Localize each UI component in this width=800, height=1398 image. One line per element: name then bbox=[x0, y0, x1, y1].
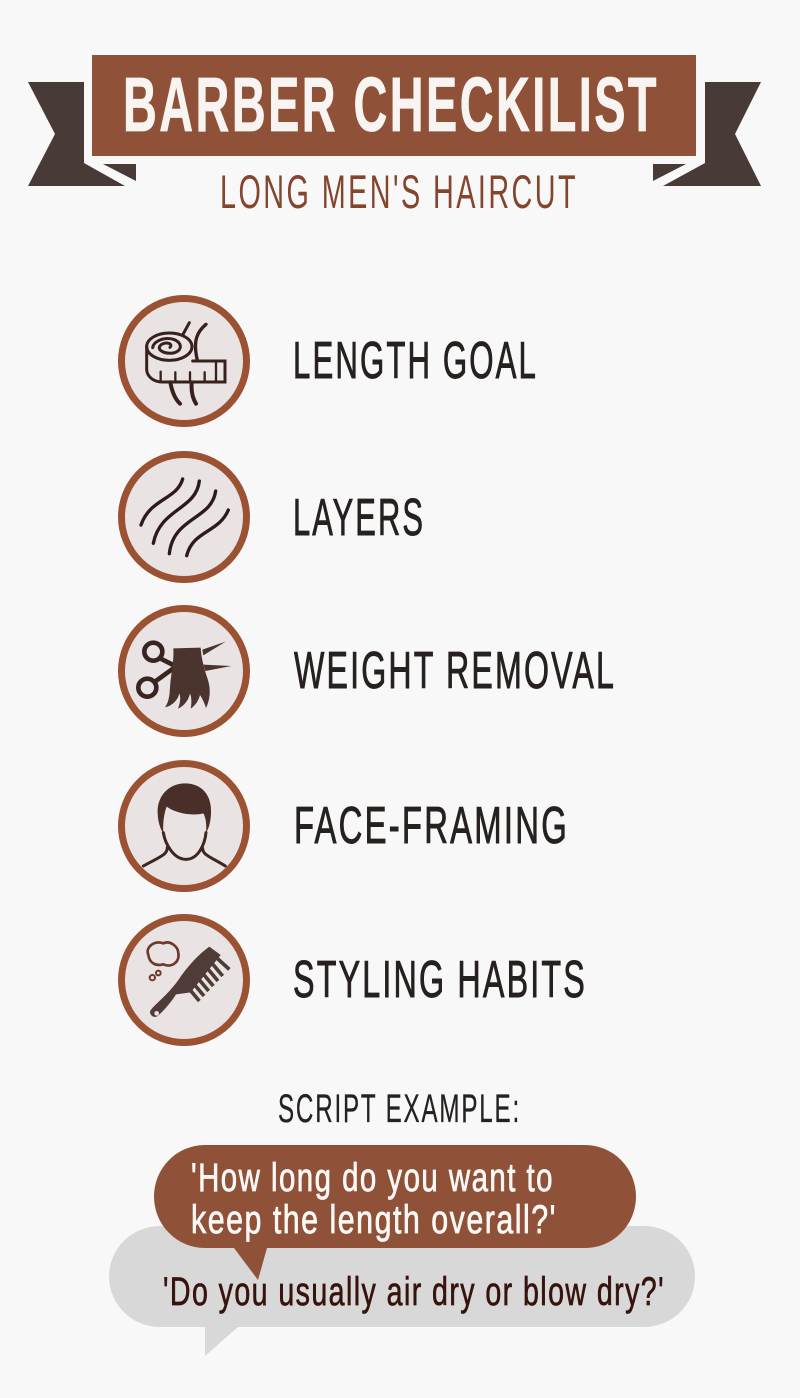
checklist item: length goal bbox=[122, 298, 538, 424]
question: keep the length: keep the length overall?' bbox=[191, 1198, 557, 1242]
label: length goal: LENGTH GOAL bbox=[293, 332, 538, 390]
checklist item: layers bbox=[122, 454, 425, 580]
icon: scissors cutting hair bbox=[122, 608, 246, 734]
subtitle: LONG MEN'S HAIRCUT bbox=[220, 165, 578, 218]
checklist item: face-framing bbox=[122, 764, 569, 888]
label: face-framing: FACE-FRAMING bbox=[294, 797, 569, 855]
checklist item: styling habits bbox=[122, 918, 587, 1042]
banner panel bbox=[92, 55, 696, 156]
title banner bbox=[28, 55, 761, 186]
label: styling habits: STYLING HABITS bbox=[293, 951, 587, 1009]
label: weight removal: WEIGHT REMOVAL bbox=[294, 642, 616, 700]
icon: comb and thought bubble bbox=[122, 918, 246, 1042]
speech bubble: brown bbox=[154, 1145, 636, 1280]
checklist item: weight removal bbox=[122, 608, 616, 734]
heading: script example: SCRIPT EXAMPLE: bbox=[278, 1087, 521, 1131]
icon: man's head with short hair bbox=[122, 764, 246, 888]
icon: measuring tape and hair bbox=[122, 298, 246, 424]
left ribbon tail bbox=[28, 82, 136, 186]
speech bubble: gray bbox=[109, 1226, 695, 1356]
label: layers: LAYERS bbox=[293, 489, 425, 547]
right ribbon tail bbox=[653, 82, 761, 186]
icon: wavy hair strands bbox=[122, 454, 246, 580]
question: how long: 'How long do you want to bbox=[191, 1156, 554, 1200]
